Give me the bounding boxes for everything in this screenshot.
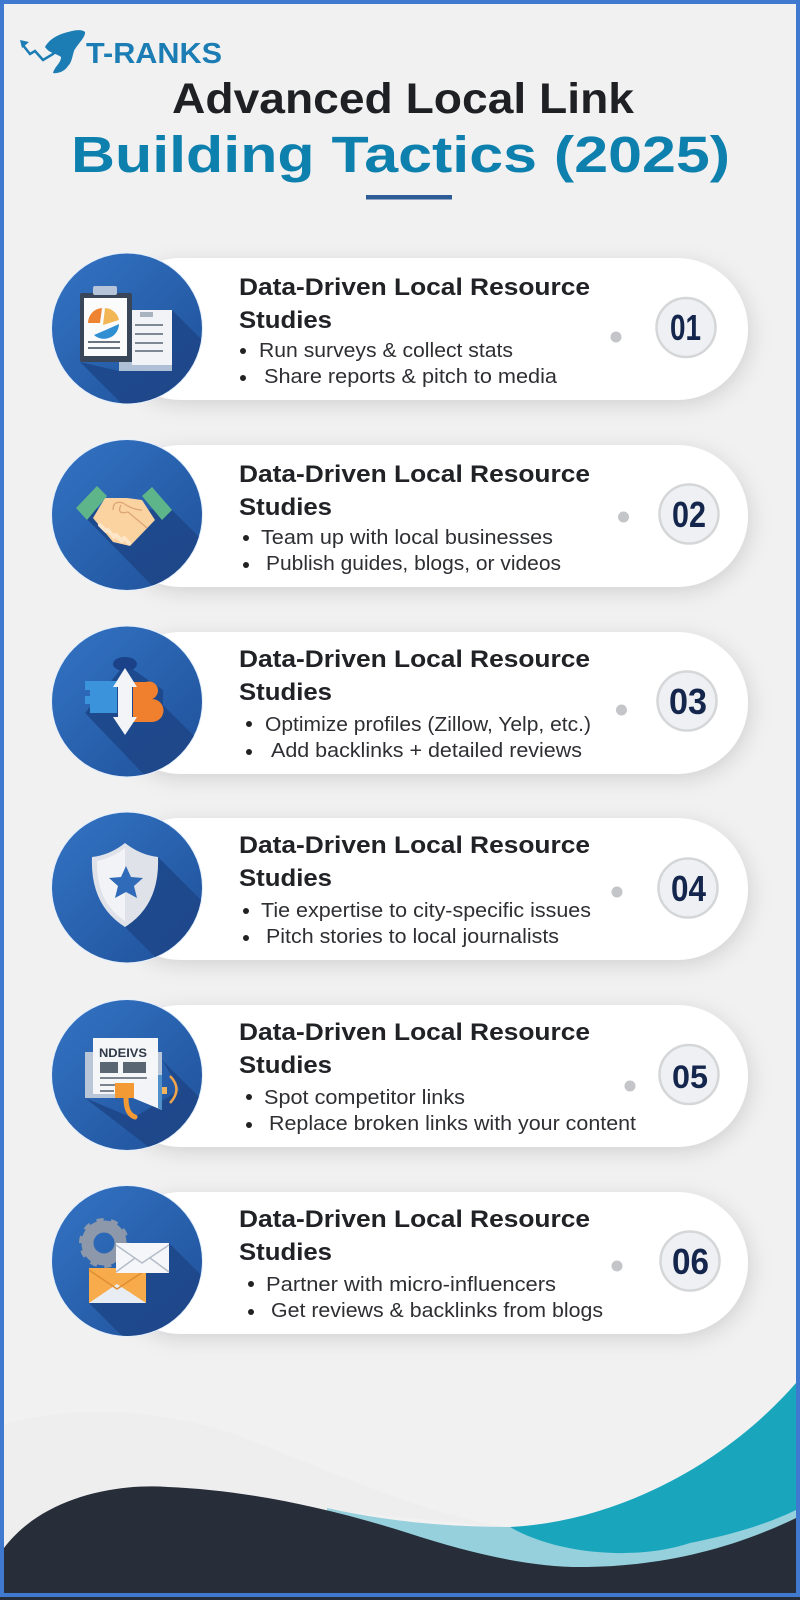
number badge: 03 — [669, 681, 707, 722]
text — [239, 832, 591, 948]
number badge: 06 — [672, 1241, 709, 1282]
number badge: 01 — [670, 307, 701, 348]
icon: gear and envelopes — [51, 1185, 203, 1337]
number badge — [656, 298, 716, 357]
dot — [624, 1080, 636, 1092]
text: Add backlinks + detailed reviews — [271, 740, 582, 762]
dot — [610, 332, 622, 342]
text: Publish guides, blogs, or videos — [266, 553, 561, 575]
number badge — [660, 1232, 720, 1290]
text: Optimize profiles (Zillow, Yelp, etc.) — [265, 714, 591, 736]
number badge — [660, 484, 718, 544]
number badge — [660, 1045, 718, 1104]
number badge: 02 — [672, 494, 706, 535]
card — [110, 632, 748, 774]
number badge — [658, 858, 718, 918]
panel: item 6 — [51, 1185, 757, 1346]
card — [110, 1005, 748, 1147]
panel: item 3 — [51, 626, 757, 786]
wave: dark navy — [4, 1486, 796, 1600]
text: Data-Driven Local Resource — [239, 1206, 590, 1233]
number badge: 05 — [672, 1059, 708, 1095]
dot — [616, 704, 627, 716]
panel: item 4 — [51, 812, 757, 972]
icon: puzzle and arrow — [51, 626, 203, 778]
text: Team up with local businesses — [261, 527, 553, 549]
text — [239, 1019, 636, 1135]
text: Replace broken links with your content — [269, 1113, 636, 1135]
text: Studies — [239, 865, 332, 892]
icon: newspaper and megaphone — [51, 999, 203, 1151]
number badge — [658, 672, 716, 730]
panel: item 1 — [51, 252, 757, 412]
text — [239, 1206, 603, 1322]
dot — [612, 886, 622, 898]
text: Studies — [239, 1052, 332, 1079]
wave: teal — [510, 1383, 796, 1600]
number badge: 04 — [671, 868, 706, 909]
wave: light blue — [327, 1508, 796, 1600]
title — [71, 75, 730, 183]
text — [239, 461, 590, 575]
card — [110, 258, 748, 400]
logo — [20, 30, 222, 73]
text: Get reviews & backlinks from blogs — [271, 1300, 603, 1322]
title line 1: Advanced Local Link — [172, 75, 634, 123]
dot — [618, 512, 629, 522]
text: Run surveys & collect stats — [259, 340, 513, 362]
text: Data-Driven Local Resource — [239, 461, 590, 488]
icon: handshake — [51, 439, 203, 591]
icon: shield with star — [51, 812, 203, 964]
card — [110, 445, 748, 587]
text: Pitch stories to local journalists — [266, 926, 559, 948]
title line 2: Building Tactics (2025) — [71, 126, 730, 183]
text: Studies — [239, 494, 332, 521]
text: Studies — [239, 1239, 332, 1266]
icon: logo mark — [20, 30, 85, 73]
text — [239, 274, 590, 388]
panel: item 2 — [51, 439, 748, 610]
dot — [612, 1260, 622, 1272]
logo text: T-RANKS — [86, 38, 222, 70]
text: Share reports & pitch to media — [264, 366, 558, 388]
text: Spot competitor links — [264, 1087, 465, 1109]
background wave: faint — [0, 1412, 510, 1548]
text: Data-Driven Local Resource — [239, 1019, 590, 1046]
text: Data-Driven Local Resource — [239, 274, 590, 301]
panel: item 5 — [51, 999, 748, 1175]
icon: clipboard report — [51, 252, 203, 404]
text: Tie expertise to city-specific issues — [261, 900, 591, 922]
title underline — [366, 195, 452, 200]
text — [239, 646, 591, 762]
card — [110, 818, 748, 960]
text: Studies — [239, 307, 332, 334]
card — [110, 1192, 748, 1334]
text: Studies — [239, 679, 332, 706]
text: Data-Driven Local Resource — [239, 646, 590, 673]
text: Data-Driven Local Resource — [239, 832, 590, 859]
icon: newspaper and megaphone: NDEIVS — [99, 1046, 147, 1060]
text: Partner with micro-influencers — [266, 1274, 556, 1296]
